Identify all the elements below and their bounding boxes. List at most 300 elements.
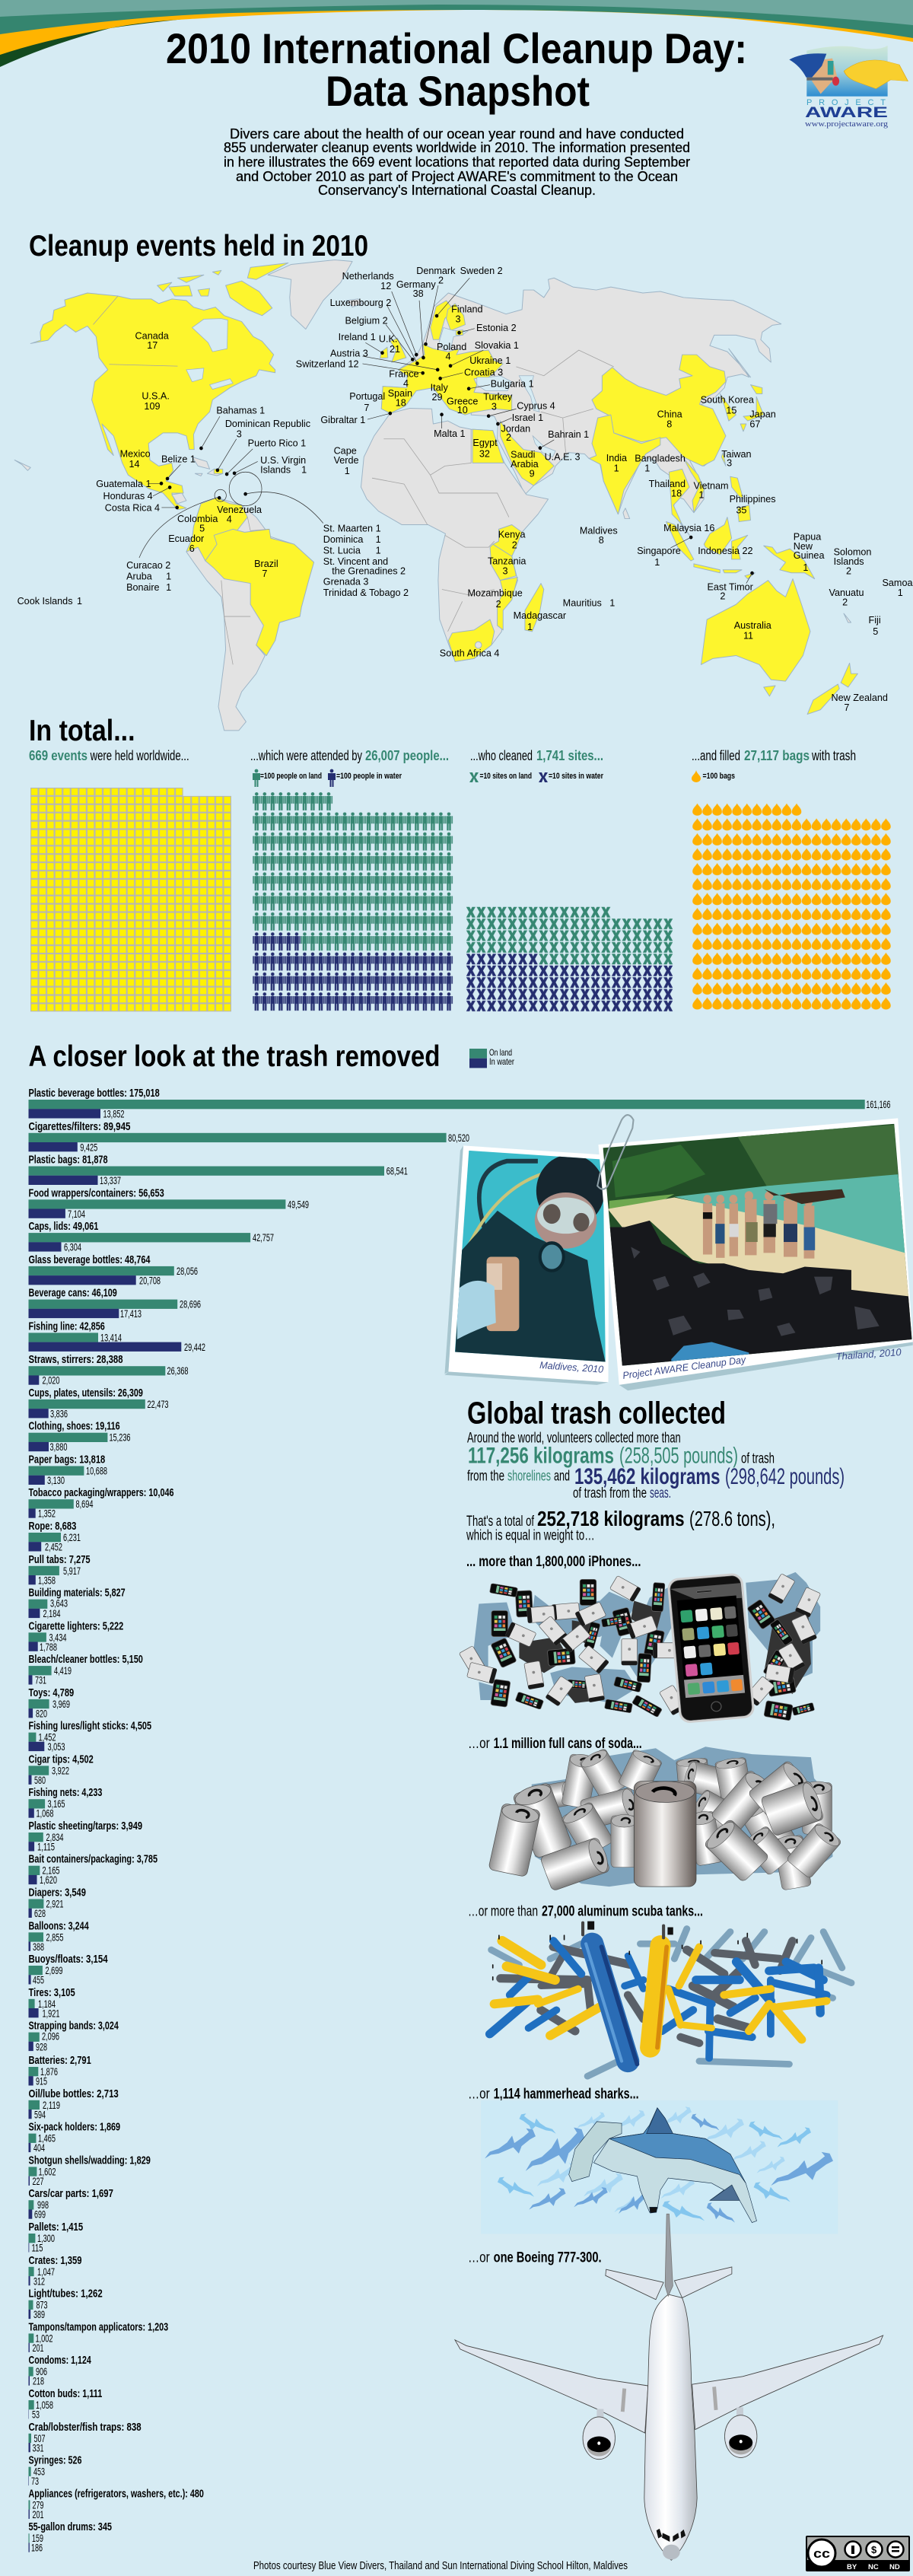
map labels: Africa, Asia and Oceania: 2 bbox=[512, 540, 517, 551]
map labels: Americas and Europe west: Puerto Rico 1 bbox=[248, 437, 306, 448]
chart legend bbox=[469, 1047, 514, 1068]
bar: Crates bbox=[29, 2254, 82, 2287]
bar: Toys bbox=[29, 1686, 74, 1719]
map labels: Africa, Asia and Oceania: Poland bbox=[437, 341, 466, 352]
chart legend: In water bbox=[489, 1056, 514, 1067]
map labels: Africa, Asia and Oceania: 7 bbox=[844, 702, 849, 713]
heading: A closer look at the trash removed: A closer look at the trash removed bbox=[29, 1040, 440, 1073]
map labels: Africa, Asia and Oceania: 8 bbox=[599, 534, 604, 546]
logo: Project AWARE: www.projectaware.org bbox=[805, 120, 888, 129]
bar: Beverage cans: Beverage cans: 46,109 bbox=[29, 1287, 117, 1300]
bar: Straws, stirrers: 26,368 bbox=[167, 1364, 189, 1377]
bar: Oil/lube bottles bbox=[29, 2087, 119, 2120]
bar: Tires bbox=[29, 1986, 75, 2019]
bar: Tampons/tampon applicators bbox=[29, 2320, 168, 2354]
intro text: Conservancy's International Coastal Cleanup. bbox=[318, 183, 596, 198]
map labels: Americas and Europe west: Belgium 2 bbox=[345, 314, 388, 326]
bar: Cotton buds bbox=[29, 2387, 102, 2420]
large blue tank bbox=[583, 1922, 637, 2064]
map labels: Africa, Asia and Oceania: 2 bbox=[506, 431, 511, 443]
bar: Plastic bags bbox=[29, 1154, 408, 1186]
map labels: Africa, Asia and Oceania: Papua bbox=[794, 530, 822, 543]
photo captions bbox=[539, 1346, 902, 1381]
bar: Fishing nets: 1,068 bbox=[37, 1807, 54, 1820]
text: global trash totals: (258,505 pounds) bbox=[619, 1443, 738, 1469]
illustration: scuba tanks bbox=[490, 1922, 851, 2076]
map labels: Americas and Europe west: Italy bbox=[431, 381, 448, 393]
bar: Crates: 1,047 bbox=[37, 2266, 55, 2278]
map labels: Africa, Asia and Oceania: Jordan bbox=[501, 422, 530, 434]
map labels: Africa, Asia and Oceania: 4 bbox=[445, 350, 450, 361]
bar: Caps, lids: 6,304 bbox=[64, 1241, 81, 1253]
caption: hammerhead sharks: 1,114 hammerhead sharks... bbox=[494, 2086, 639, 2102]
badge: Creative Commons BY NC ND: NC bbox=[868, 2563, 879, 2571]
text: global trash totals: shorelines bbox=[507, 1469, 551, 1484]
map labels: Africa, Asia and Oceania: U.A.E. 3 bbox=[545, 451, 581, 463]
map labels: Africa, Asia and Oceania: 2 bbox=[846, 565, 851, 577]
photo captions: Maldives, 2010 bbox=[539, 1359, 604, 1375]
large yellow tank bbox=[651, 1926, 673, 2048]
bar: Building materials: 3,643 bbox=[50, 1597, 68, 1610]
bar: Syringes: 453 bbox=[33, 2466, 45, 2478]
map labels: Africa, Asia and Oceania: 2 bbox=[842, 596, 848, 607]
badge: Creative Commons BY NC ND: ND bbox=[889, 2563, 900, 2571]
bar: Fishing lures/light sticks bbox=[29, 1720, 151, 1753]
map labels: Africa, Asia and Oceania: Solomon bbox=[834, 546, 871, 557]
bar: Beverage cans bbox=[29, 1287, 201, 1320]
map labels: Africa, Asia and Oceania: Bahrain 1 bbox=[548, 428, 589, 440]
map labels: Americas and Europe west: 109 bbox=[144, 400, 160, 412]
map labels: Africa, Asia and Oceania: Mozambique bbox=[468, 587, 523, 599]
bar: Plastic sheeting/tarps: 1,115 bbox=[37, 1840, 55, 1852]
totals captions: 27,117 bags bbox=[744, 748, 810, 763]
bar: Batteries: 1,876 bbox=[40, 2065, 58, 2078]
bar: Rope: 2,452 bbox=[45, 1540, 62, 1552]
map labels: Americas and Europe west: the Grenadines 2 bbox=[332, 565, 406, 576]
map labels: Americas and Europe west: Mexico bbox=[120, 447, 151, 460]
bar: Cups, plates, utensils: 3,836 bbox=[50, 1407, 68, 1419]
bar: Crates: 312 bbox=[33, 2275, 45, 2287]
bar: Tires: 1,921 bbox=[43, 2007, 60, 2019]
bar: Appliances: 201 bbox=[32, 2508, 44, 2520]
text: global trash totals: and bbox=[554, 1469, 570, 1484]
bar: Crates: Crates: 1,359 bbox=[29, 2254, 82, 2267]
map labels: Americas and Europe west: Islands bbox=[260, 463, 291, 476]
map labels: Americas and Europe west: St. Maarten bbox=[323, 522, 373, 534]
bar: Fishing nets: Fishing nets: 4,233 bbox=[29, 1786, 102, 1799]
badge: Creative Commons BY NC ND: $ bbox=[871, 2544, 877, 2555]
badge: Creative Commons BY NC ND: BY bbox=[847, 2563, 857, 2571]
bar: Pull tabs: 5,917 bbox=[63, 1565, 81, 1577]
map labels: Americas and Europe west: 1 bbox=[166, 581, 171, 593]
bar: Rope: Rope: 8,683 bbox=[29, 1520, 76, 1533]
bar: Bait containers/packaging: 2,165 bbox=[43, 1864, 60, 1877]
photo captions: Project AWARE Cleanup Day bbox=[622, 1354, 747, 1381]
map labels: Americas and Europe west: Spain bbox=[388, 387, 412, 399]
bar: Cotton buds: 1,058 bbox=[36, 2399, 53, 2411]
photo captions: Thailand, 2010 bbox=[835, 1346, 902, 1362]
bar: Crab/lobster/fish traps: 507 bbox=[33, 2432, 46, 2444]
bar: Balloons: Balloons: 3,244 bbox=[29, 1919, 89, 1932]
map labels: Africa, Asia and Oceania: Estonia 2 bbox=[476, 322, 517, 333]
bar: Cigarettes/filters: 9,425 bbox=[80, 1141, 97, 1153]
map labels: Americas and Europe west: Denmark bbox=[416, 265, 456, 276]
bar: Tampons/tampon applicators: Tampons/tampon applicators: 1,203 bbox=[29, 2320, 168, 2333]
bar: Cigarettes/filters bbox=[29, 1120, 469, 1153]
map labels: Americas and Europe west: Germany bbox=[396, 279, 436, 290]
pictogram: 669 events bbox=[30, 788, 231, 1011]
map labels: Africa, Asia and Oceania: 15 bbox=[726, 404, 736, 416]
map labels: Africa, Asia and Oceania: East Timor bbox=[708, 581, 754, 593]
map labels: Africa, Asia and Oceania: Kenya bbox=[498, 528, 526, 540]
bar: Cars/car parts bbox=[29, 2187, 113, 2221]
bar: Oil/lube bottles: 2,119 bbox=[43, 2099, 60, 2111]
map labels: Africa, Asia and Oceania: Greece bbox=[447, 396, 478, 407]
map labels: Africa, Asia and Oceania: Australia bbox=[734, 619, 772, 631]
bar: Six-pack holders: Six-pack holders: 1,869 bbox=[29, 2121, 120, 2134]
map labels: Americas and Europe west: Gibraltar 1 bbox=[320, 414, 365, 425]
caption: hammerhead sharks: …or bbox=[468, 2086, 490, 2102]
bar: Toys: Toys: 4,789 bbox=[29, 1686, 74, 1699]
bar: Rope bbox=[29, 1520, 81, 1552]
bar: Glass beverage bottles: 28,056 bbox=[177, 1265, 198, 1277]
bar: Batteries bbox=[29, 2054, 91, 2087]
badge: Creative Commons BY NC ND: cc bbox=[813, 2546, 830, 2561]
bar: Bait containers/packaging: Bait containers/packaging: 3,785 bbox=[29, 1853, 157, 1866]
bar chart: trash items bbox=[29, 1087, 891, 2554]
bar: Bait containers/packaging: 1,620 bbox=[40, 1874, 57, 1886]
map labels: Africa, Asia and Oceania: 5 bbox=[873, 626, 878, 637]
header wave band bbox=[0, 0, 913, 67]
bar: Pallets: 1,300 bbox=[37, 2232, 55, 2244]
map labels: Americas and Europe west: Cape bbox=[334, 444, 357, 457]
title: 2010 International Cleanup Day: bbox=[166, 24, 747, 72]
map labels: Africa, Asia and Oceania: 1 bbox=[614, 462, 619, 474]
bar: Toys: 820 bbox=[36, 1707, 47, 1719]
map labels: Americas and Europe west: 3 bbox=[237, 428, 242, 439]
bar: Cups, plates, utensils: Cups, plates, utensils: 26,309 bbox=[29, 1387, 143, 1399]
map labels: Africa, Asia and Oceania: Malta 1 bbox=[434, 428, 466, 439]
heading: Global trash collected: Global trash collected bbox=[467, 1396, 726, 1431]
bar: Balloons: 388 bbox=[33, 1941, 44, 1953]
bar: Crab/lobster/fish traps: 331 bbox=[32, 2441, 44, 2453]
bar: Tampons/tampon applicators: 201 bbox=[32, 2342, 44, 2354]
map labels: Americas and Europe west: Switzerland 12 bbox=[296, 358, 359, 370]
photo: Thailand beach cleanup bbox=[598, 1118, 913, 1390]
bar: Plastic sheeting/tarps: Plastic sheeting/tarps: 3,949 bbox=[29, 1820, 142, 1832]
map labels: Americas and Europe west: 7 bbox=[262, 568, 267, 579]
map labels: Americas and Europe west: 4 bbox=[403, 377, 409, 389]
bar: Tobacco packaging/wrappers: 8,694 bbox=[76, 1498, 94, 1510]
map labels: Africa, Asia and Oceania: Indonesia 22 bbox=[698, 545, 753, 556]
caption: scuba tanks: …or more than bbox=[468, 1904, 538, 1919]
intro text bbox=[224, 126, 690, 198]
bar: Tobacco packaging/wrappers: Tobacco packaging/wrappers: 10,046 bbox=[29, 1486, 174, 1499]
map labels: Africa, Asia and Oceania: 1 bbox=[527, 621, 533, 632]
map labels: Africa, Asia and Oceania: South Korea bbox=[701, 394, 755, 406]
bar: Condoms bbox=[29, 2354, 91, 2387]
map labels: Africa, Asia and Oceania: 1 bbox=[698, 489, 704, 501]
bar: 55-gallon drums: 186 bbox=[31, 2542, 43, 2554]
text: global trash totals bbox=[466, 1431, 845, 1544]
map labels: Africa, Asia and Oceania: New bbox=[794, 540, 813, 552]
pictogram legends: =100 people on land bbox=[260, 772, 322, 781]
bar: Diapers: Diapers: 3,549 bbox=[29, 1886, 86, 1899]
totals captions: 669 events bbox=[29, 748, 87, 763]
bar: Glass beverage bottles: Glass beverage bottles: 48,764 bbox=[29, 1253, 151, 1266]
bar: Tampons/tampon applicators: 1,002 bbox=[35, 2332, 53, 2344]
map labels: Africa, Asia and Oceania: Turkey bbox=[483, 390, 513, 402]
map labels: Americas and Europe west: Ecuador bbox=[168, 533, 205, 544]
bar: Pallets bbox=[29, 2221, 83, 2254]
bar: Glass beverage bottles bbox=[29, 1253, 198, 1286]
map labels: Africa, Asia and Oceania: 1 bbox=[609, 597, 615, 609]
map labels: Americas and Europe west: 7 bbox=[364, 402, 369, 413]
map labels: Americas and Europe west: St. Vincent and bbox=[323, 556, 388, 567]
bar: Plastic sheeting/tarps: 2,834 bbox=[46, 1831, 64, 1843]
bar: Syringes: Syringes: 526 bbox=[29, 2454, 82, 2467]
bar: Cigarettes/filters: Cigarettes/filters: 89,945 bbox=[29, 1120, 131, 1133]
bar: Plastic bags: 68,541 bbox=[387, 1164, 408, 1177]
bar: Cars/car parts: Cars/car parts: 1,697 bbox=[29, 2187, 113, 2200]
world map bbox=[14, 260, 913, 731]
map labels: Africa, Asia and Oceania: 2 bbox=[496, 598, 501, 610]
map labels: Americas and Europe west: U.S. Virgin bbox=[260, 454, 306, 466]
map labels: Africa, Asia and Oceania: Sweden 2 bbox=[460, 265, 503, 276]
map labels: Americas and Europe west: U.K. bbox=[379, 333, 397, 345]
map labels: Africa, Asia and Oceania: South Africa 4 bbox=[440, 647, 499, 658]
bar: Clothing, shoes bbox=[29, 1420, 131, 1453]
bar: Light/tubes: Light/tubes: 1,262 bbox=[29, 2288, 103, 2301]
intro text: Divers care about the health of our ocean year round and have conducted bbox=[230, 126, 684, 142]
totals captions: 1,741 sites... bbox=[536, 748, 603, 763]
map labels: Africa, Asia and Oceania: Finland bbox=[451, 304, 482, 315]
map labels: Americas and Europe west: Dominica bbox=[323, 533, 364, 545]
bar: Cigarettes/filters: 80,520 bbox=[448, 1132, 469, 1144]
map labels: Americas and Europe west: Costa Rica 4 bbox=[105, 502, 160, 514]
bar: Fishing lures/light sticks: 3,053 bbox=[47, 1740, 65, 1753]
pictogram legends: =100 bags bbox=[703, 772, 735, 781]
bar: Condoms: Condoms: 1,124 bbox=[29, 2354, 91, 2367]
map labels: Africa, Asia and Oceania: Egypt bbox=[472, 437, 498, 448]
intro text: 855 underwater cleanup events worldwide in 2010. The information presented bbox=[224, 140, 690, 155]
map labels: Americas and Europe west: Belize 1 bbox=[161, 453, 196, 465]
map labels: Africa, Asia and Oceania: Croatia 3 bbox=[464, 367, 503, 378]
map labels: Africa, Asia and Oceania: 9 bbox=[530, 467, 535, 479]
intro text: in here illustrates the 669 event locations that reported data during September bbox=[224, 154, 690, 170]
bar: Building materials: Building materials: 5,827 bbox=[29, 1587, 126, 1600]
bar: Food wrappers/containers: 7,104 bbox=[68, 1208, 85, 1220]
pictogram: 26,007 people bbox=[253, 792, 453, 1011]
map labels: Africa, Asia and Oceania: 10 bbox=[457, 404, 468, 416]
map labels: Africa, Asia and Oceania: Singapore bbox=[637, 545, 681, 556]
bar: Straws, stirrers: Straws, stirrers: 28,388 bbox=[29, 1353, 123, 1366]
map labels: Africa, Asia and Oceania: 1 bbox=[898, 587, 903, 598]
bar: Oil/lube bottles: Oil/lube bottles: 2,713 bbox=[29, 2087, 119, 2100]
map labels: Americas and Europe west: Curacao 2 bbox=[126, 559, 170, 571]
map labels: Africa, Asia and Oceania: New Zealand bbox=[832, 692, 888, 703]
map labels: Africa, Asia and Oceania: 3 bbox=[502, 565, 507, 576]
caption: Boeing 777-300: one Boeing 777-300. bbox=[494, 2250, 602, 2266]
map labels: Africa, Asia and Oceania: Fiji bbox=[869, 614, 881, 626]
pictogram legends: =10 sites on land bbox=[479, 772, 532, 781]
bar: Fishing nets bbox=[29, 1786, 102, 1820]
text: global trash totals: of trash from the bbox=[573, 1485, 647, 1501]
bar: Shotgun shells/wadding bbox=[29, 2154, 151, 2187]
map labels: Africa, Asia and Oceania: 11 bbox=[743, 630, 753, 642]
map labels: Americas and Europe west: 1 bbox=[376, 522, 381, 534]
bar: Cigar tips: 580 bbox=[34, 1774, 46, 1786]
bar: Fishing line: 29,442 bbox=[184, 1341, 205, 1353]
bar: Strapping bands bbox=[29, 2020, 119, 2053]
bar: Tobacco packaging/wrappers: 1,352 bbox=[38, 1508, 56, 1520]
map labels: Americas and Europe west: Grenada 3 bbox=[323, 575, 368, 587]
map labels: Africa, Asia and Oceania: 8 bbox=[666, 419, 672, 430]
bar: Beverage cans: 28,696 bbox=[180, 1298, 201, 1310]
bar: Caps, lids: Caps, lids: 49,061 bbox=[29, 1220, 98, 1233]
map labels: Africa, Asia and Oceania: Japan bbox=[749, 408, 776, 419]
map labels: Americas and Europe west: France bbox=[389, 368, 419, 379]
bar: Fishing lures/light sticks: 1,452 bbox=[38, 1731, 56, 1743]
caption: scuba tanks bbox=[468, 1904, 703, 1919]
bar: Cigarette lighters: 1,788 bbox=[40, 1641, 57, 1653]
map labels: Africa, Asia and Oceania: Malaysia 16 bbox=[663, 522, 714, 533]
bar: Cotton buds: Cotton buds: 1,111 bbox=[29, 2387, 102, 2400]
pictogram legends: =100 people in water bbox=[336, 772, 402, 781]
map labels: Americas and Europe west: 1 bbox=[376, 533, 381, 545]
bar: Paper bags: 3,130 bbox=[47, 1474, 65, 1486]
bar: Food wrappers/containers bbox=[29, 1186, 309, 1220]
map labels: Africa, Asia and Oceania: 1 bbox=[803, 562, 808, 573]
text: global trash totals: That's a total of bbox=[466, 1514, 534, 1530]
bar: Plastic beverage bottles: 161,166 bbox=[866, 1098, 891, 1110]
text: global trash totals: which is equal in weight to… bbox=[466, 1528, 595, 1544]
bar: Bleach/cleaner bottles: 4,419 bbox=[54, 1664, 72, 1676]
bar: 55-gallon drums bbox=[29, 2520, 112, 2554]
bar: Cigar tips: Cigar tips: 4,502 bbox=[29, 1753, 94, 1766]
bar: Food wrappers/containers: 49,549 bbox=[288, 1198, 309, 1210]
map labels: Americas and Europe west: 14 bbox=[129, 458, 140, 470]
bar: Bleach/cleaner bottles: 731 bbox=[35, 1674, 46, 1686]
bar: Fishing line: Fishing line: 42,856 bbox=[29, 1320, 105, 1333]
bar: Bleach/cleaner bottles bbox=[29, 1653, 143, 1686]
map labels: Americas and Europe west bbox=[17, 265, 456, 607]
bar: Syringes: 73 bbox=[31, 2475, 39, 2487]
bar: Cups, plates, utensils: 22,473 bbox=[148, 1398, 169, 1410]
text: global trash totals: (278.6 tons), bbox=[689, 1507, 775, 1530]
badge: Creative Commons BY NC ND bbox=[806, 2536, 910, 2571]
map labels: Africa, Asia and Oceania: Bangladesh bbox=[635, 452, 686, 463]
illustration: Boeing 777 bbox=[455, 2214, 883, 2560]
map labels: Americas and Europe west: 38 bbox=[413, 288, 424, 299]
text: global trash totals: of trash bbox=[741, 1450, 775, 1467]
bar: Caps, lids bbox=[29, 1220, 274, 1253]
map labels: Africa, Asia and Oceania: Ukraine 1 bbox=[469, 355, 511, 366]
map labels: Africa, Asia and Oceania: Slovakia 1 bbox=[475, 339, 519, 351]
bar: Appliances bbox=[29, 2487, 204, 2520]
photo: Maldives diver bbox=[444, 1145, 609, 1385]
bar: Clothing, shoes: 15,236 bbox=[110, 1431, 131, 1444]
bar: Condoms: 218 bbox=[33, 2375, 44, 2387]
bar: Six-pack holders bbox=[29, 2121, 120, 2154]
map labels: Africa, Asia and Oceania: Maldives bbox=[580, 525, 618, 537]
bar: Cars/car parts: 998 bbox=[37, 2199, 49, 2211]
bar: Appliances: Appliances (refrigerators, washers, etc.): 480 bbox=[29, 2487, 204, 2500]
map labels: Americas and Europe west: Venezuela bbox=[217, 504, 262, 515]
map labels: Africa, Asia and Oceania: 3 bbox=[727, 457, 732, 469]
bar: Diapers bbox=[29, 1886, 86, 1919]
map labels: Africa, Asia and Oceania: Taiwan bbox=[721, 448, 752, 460]
bar: Strapping bands: 2,096 bbox=[42, 2030, 59, 2043]
bar: Paper bags bbox=[29, 1454, 107, 1486]
bar: Cigarette lighters: Cigarette lighters: 5,222 bbox=[29, 1619, 123, 1632]
bar: Fishing line: 13,414 bbox=[100, 1331, 122, 1343]
map labels: Americas and Europe west: 5 bbox=[199, 522, 205, 534]
bar: Buoys/floats bbox=[29, 1953, 108, 1986]
bar: Light/tubes bbox=[29, 2288, 103, 2320]
main shark bbox=[569, 2108, 757, 2223]
text: global trash totals: from the bbox=[467, 1469, 504, 1484]
bar: Pull tabs: 1,358 bbox=[38, 1574, 56, 1586]
map labels: Africa, Asia and Oceania: Cyprus 4 bbox=[517, 400, 555, 412]
large can bbox=[634, 1782, 696, 1887]
map labels: Africa, Asia and Oceania: Guinea bbox=[794, 549, 825, 561]
bar: Balloons bbox=[29, 1919, 89, 1953]
chart legend: On land bbox=[489, 1047, 512, 1058]
map labels: Americas and Europe west: 17 bbox=[147, 339, 157, 351]
pictogram legends: =10 sites in water bbox=[549, 772, 604, 781]
bar: Cigar tips: 3,922 bbox=[52, 1764, 69, 1776]
totals captions: 26,007 people... bbox=[365, 748, 449, 763]
text: global trash totals: 135,462 kilograms bbox=[574, 1464, 720, 1489]
map labels: Americas and Europe west: 1 bbox=[345, 465, 350, 476]
text: global trash totals: Around the world, volunteers collected more than bbox=[467, 1431, 681, 1447]
map labels: Americas and Europe west: 21 bbox=[390, 343, 400, 355]
bar: Six-pack holders: 404 bbox=[33, 2141, 45, 2154]
text: global trash totals: 252,718 kilograms bbox=[537, 1507, 685, 1530]
map labels: Africa, Asia and Oceania: Tanzania bbox=[488, 555, 526, 566]
map labels: Americas and Europe west: U.S.A. bbox=[142, 390, 170, 402]
map labels: Americas and Europe west: Portugal bbox=[349, 390, 385, 402]
bar: Glass beverage bottles: 20,708 bbox=[139, 1274, 161, 1286]
map labels: Africa, Asia and Oceania: China bbox=[657, 409, 682, 420]
totals captions: ...and filled bbox=[692, 748, 740, 763]
title: Data Snapshot bbox=[326, 67, 590, 115]
map labels: Americas and Europe west: 4 bbox=[227, 514, 232, 525]
map labels: Americas and Europe west: Cook Islands bbox=[17, 595, 73, 607]
caption: scuba tanks: 27,000 aluminum scuba tanks... bbox=[542, 1904, 703, 1919]
bar: Crab/lobster/fish traps bbox=[29, 2421, 142, 2453]
pictogram: 1,741 sites bbox=[466, 906, 673, 1012]
bar: Clothing, shoes: 3,880 bbox=[50, 1441, 68, 1453]
photo credit: Photos courtesy Blue View Divers, Thailand and Sun International Diving School Hilton, Maldives bbox=[253, 2560, 628, 2572]
map labels: Americas and Europe west: 1 bbox=[301, 463, 307, 476]
map labels: Americas and Europe west: Canada bbox=[135, 330, 170, 342]
map labels: Africa, Asia and Oceania: Madagascar bbox=[514, 610, 567, 621]
bar: Appliances: 279 bbox=[32, 2498, 44, 2511]
pictogram: 27,117 bags bbox=[692, 804, 891, 1012]
map labels: Africa, Asia and Oceania: Mauritius bbox=[563, 597, 602, 609]
bar: Shotgun shells/wadding: 1,602 bbox=[38, 2165, 56, 2177]
map labels: Africa, Asia and Oceania: 35 bbox=[736, 504, 746, 515]
logo: Project AWARE: AWARE bbox=[805, 105, 888, 121]
totals captions: ...which were attended by bbox=[250, 748, 362, 763]
bar: Paper bags: Paper bags: 13,818 bbox=[29, 1454, 105, 1466]
bar: Caps, lids: 42,757 bbox=[253, 1231, 274, 1243]
caption: Boeing 777-300 bbox=[468, 2250, 602, 2266]
bar: Straws, stirrers bbox=[29, 1353, 189, 1387]
bar: Tires: Tires: 3,105 bbox=[29, 1986, 75, 1999]
